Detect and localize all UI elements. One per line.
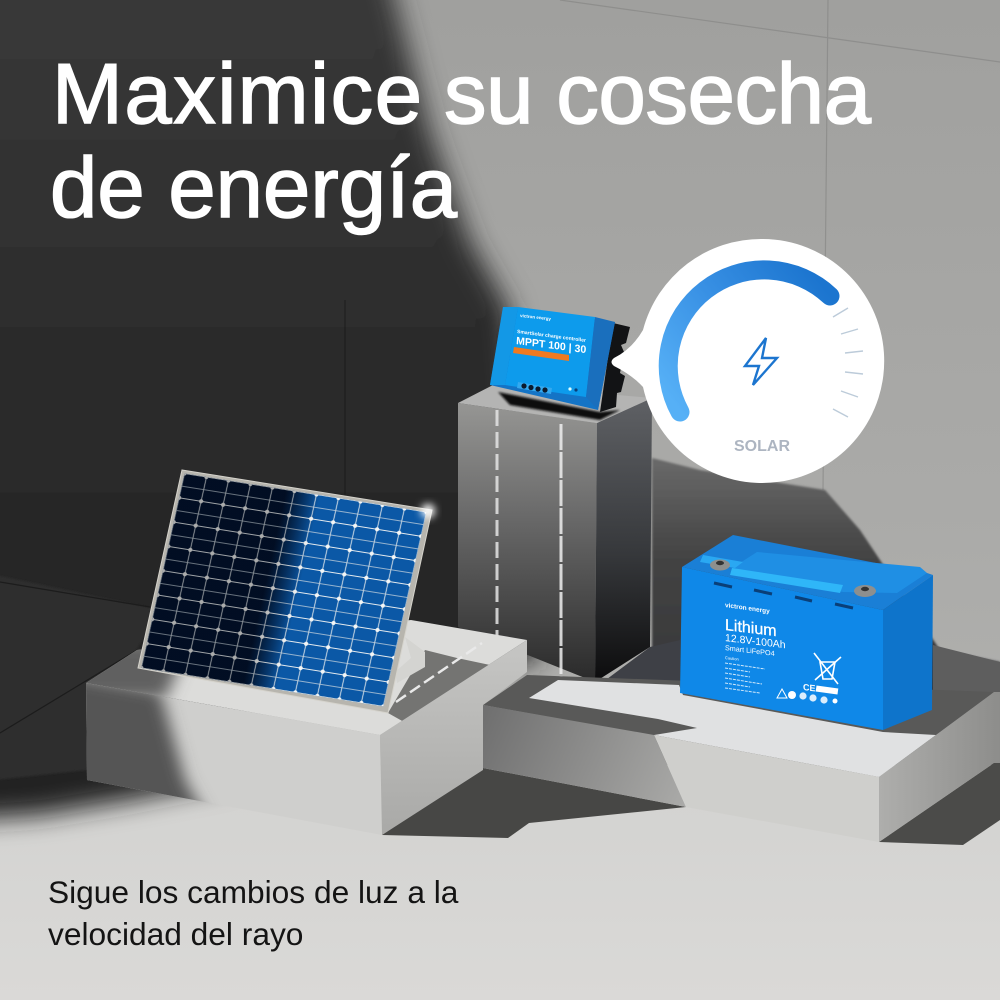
panel shadow on top xyxy=(388,650,490,722)
panel stand xyxy=(395,637,425,683)
icon: lightning bolt xyxy=(745,338,777,385)
label xyxy=(516,313,587,356)
wall shadow left xyxy=(0,0,540,820)
side face xyxy=(380,640,527,835)
title: de energía xyxy=(50,141,458,236)
battery label: Lithium xyxy=(725,616,777,640)
floor shadow behind battery xyxy=(595,640,680,690)
gauge arc xyxy=(668,270,830,412)
wall base shade right xyxy=(933,645,1000,694)
label: victron energy xyxy=(520,313,552,321)
charge controller xyxy=(490,307,630,420)
label: SmartSolar charge controller xyxy=(517,329,586,344)
floor xyxy=(0,765,1000,1000)
battery label: Caution xyxy=(725,655,739,662)
body xyxy=(490,307,615,410)
bubble xyxy=(612,239,884,483)
left stone block xyxy=(50,620,527,835)
recycling icon xyxy=(814,653,841,684)
glint xyxy=(421,504,435,518)
battery label: 12.8V-100Ah xyxy=(725,632,786,651)
panel frame xyxy=(138,470,432,713)
battery label: CE xyxy=(803,682,815,693)
terminals xyxy=(710,560,876,597)
caption: velocidad del rayo xyxy=(48,916,303,952)
pedestal block xyxy=(458,384,652,682)
connector xyxy=(517,382,578,394)
certification marks xyxy=(777,689,838,704)
battery front xyxy=(680,567,883,730)
title: su cosecha xyxy=(444,47,872,142)
label: MPPT 100 | 30 xyxy=(516,335,587,356)
caption: Sigue los cambios de luz a la xyxy=(48,874,459,910)
title xyxy=(50,47,872,236)
gauge callout xyxy=(612,239,884,483)
floor shadow centre xyxy=(382,768,686,838)
gauge ticks xyxy=(833,308,863,417)
battery side xyxy=(883,575,933,730)
battery top xyxy=(682,535,933,610)
left floor lines xyxy=(0,300,345,780)
floor shadow right xyxy=(879,763,1000,845)
battery label xyxy=(725,602,815,693)
vent slots xyxy=(714,583,853,608)
gauge label: SOLAR xyxy=(734,438,790,455)
wall shadow behind battery xyxy=(652,458,1000,780)
top surface xyxy=(86,620,527,735)
title: Maximice xyxy=(52,47,422,142)
battery xyxy=(680,535,933,730)
right stone block xyxy=(483,675,1000,842)
battery label: Smart LiFePO4 xyxy=(725,643,775,658)
caption xyxy=(48,874,459,952)
solar panel xyxy=(138,470,435,713)
heatsink xyxy=(600,323,630,412)
front face xyxy=(86,683,382,835)
battery label: victron energy xyxy=(725,602,770,615)
panel cells xyxy=(141,474,427,706)
